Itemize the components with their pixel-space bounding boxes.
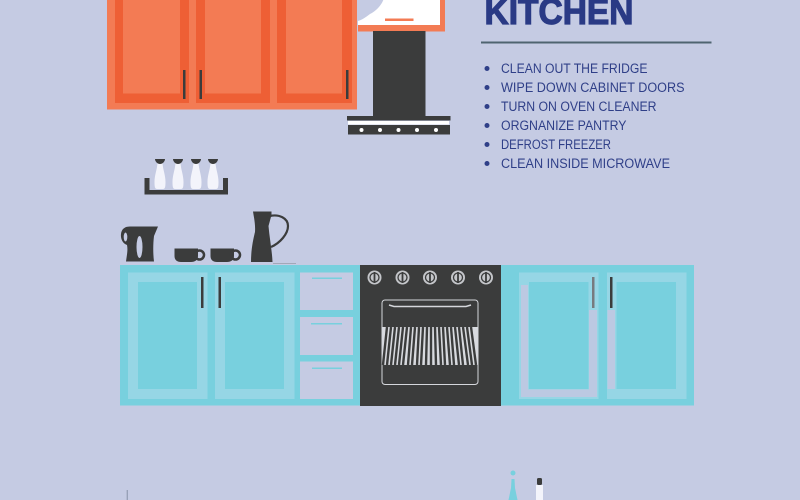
checklist: WIPE DOWN CABINET DOORS (501, 80, 684, 95)
bottom teal bottle (508, 470, 518, 500)
checklist: CLEAN OUT THE FRIDGE (501, 61, 648, 76)
checklist: CLEAN INSIDE MICROWAVE (501, 156, 670, 171)
kettle (121, 226, 158, 262)
upper orange cabinets (107, 0, 357, 110)
microwave cabinet (358, 0, 445, 32)
lower left cabinet (120, 265, 360, 406)
jug (251, 212, 296, 264)
oven rack (382, 327, 478, 365)
oven door (382, 300, 478, 384)
oven (360, 265, 501, 406)
bottom white bottle (536, 478, 543, 500)
knobs (368, 270, 493, 284)
checklist: TURN ON OVEN CLEANER (501, 99, 657, 114)
lower right cabinet (501, 265, 694, 406)
range hood (347, 31, 450, 134)
checklist: ORGNANIZE PANTRY (501, 118, 626, 133)
drawers (300, 272, 353, 399)
title divider (481, 42, 712, 44)
shelf with bottles (144, 159, 228, 194)
bottom thin stem (127, 490, 128, 500)
checklist (484, 61, 684, 171)
checklist: DEFROST FREEZER (501, 137, 611, 152)
cups (174, 248, 240, 262)
